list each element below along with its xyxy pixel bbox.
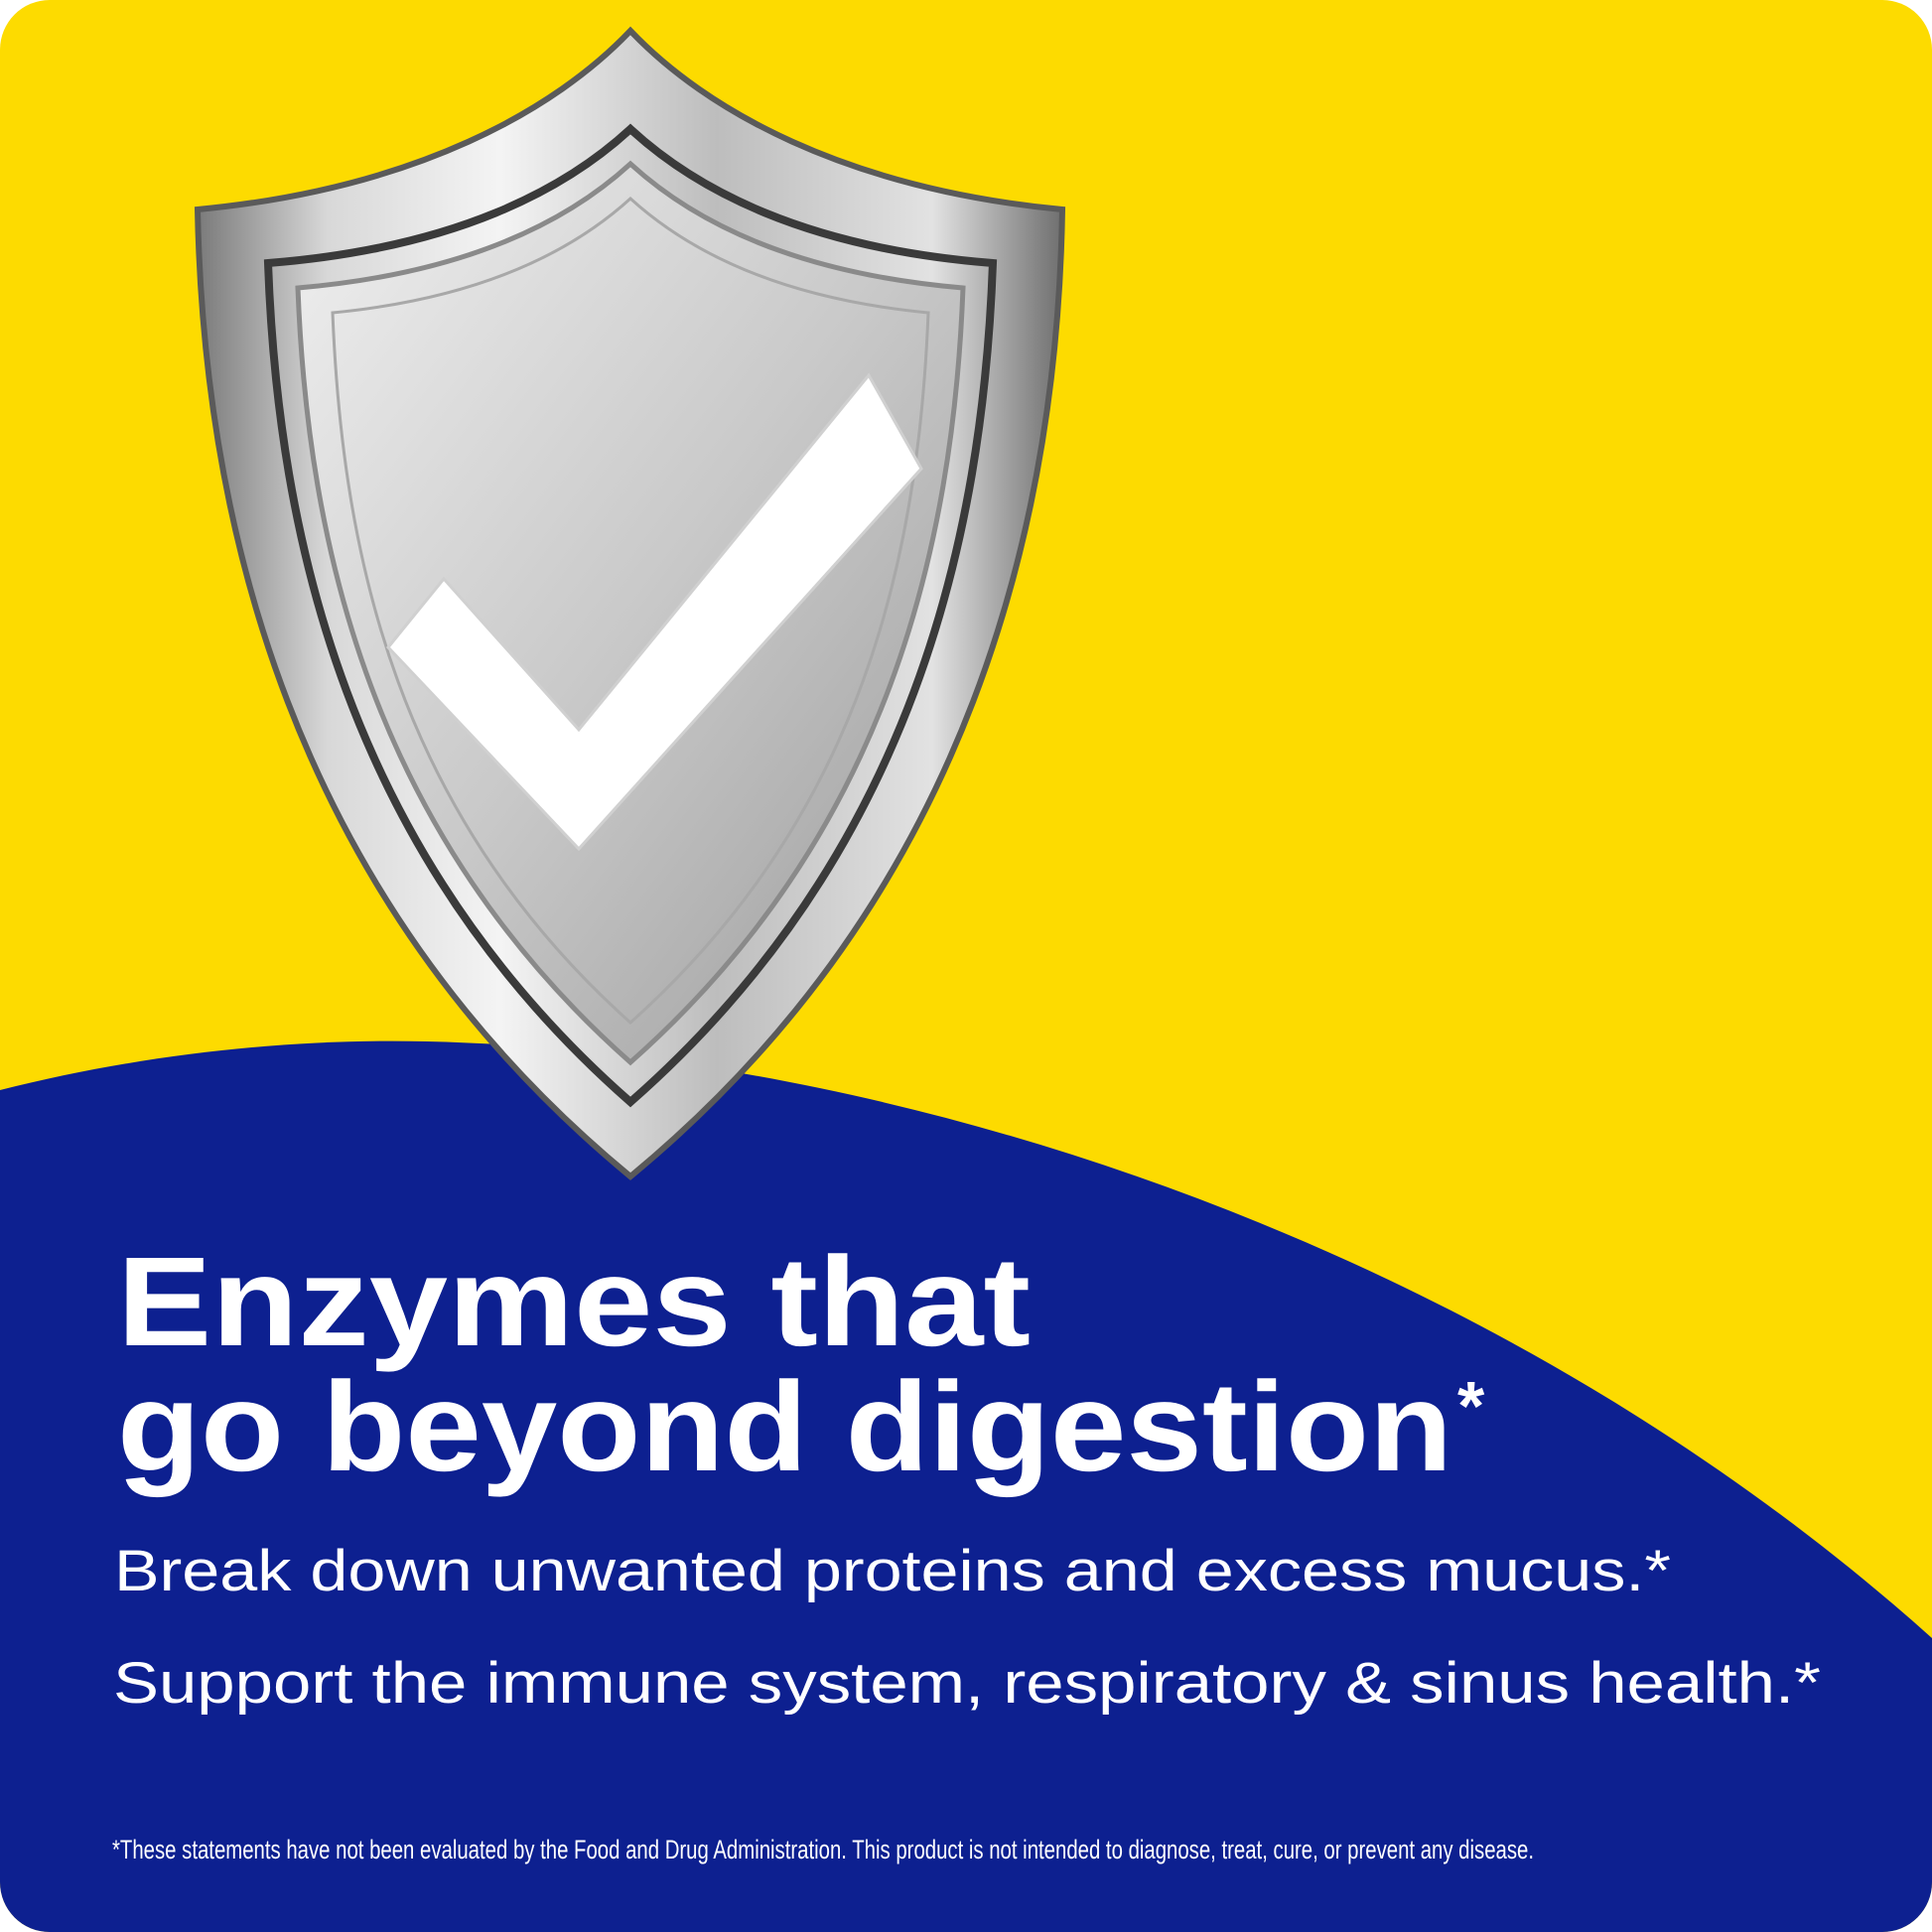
subtitle: benefits: Break down unwanted proteins and excess mucus.* [114,1539,1671,1603]
title: Enzymes that [117,1231,1031,1373]
icon: checkmark [388,375,921,849]
title [117,1231,1485,1498]
title: go beyond digestion [117,1356,1452,1498]
blue curved panel [0,1041,1932,1932]
subtitle: benefits [113,1539,1821,1716]
subtitle: benefits: Support the immune system, respiratory & sinus health.* [113,1651,1821,1716]
title: * [1457,1367,1485,1445]
icon: silver shield with checkmark [198,31,1062,1176]
